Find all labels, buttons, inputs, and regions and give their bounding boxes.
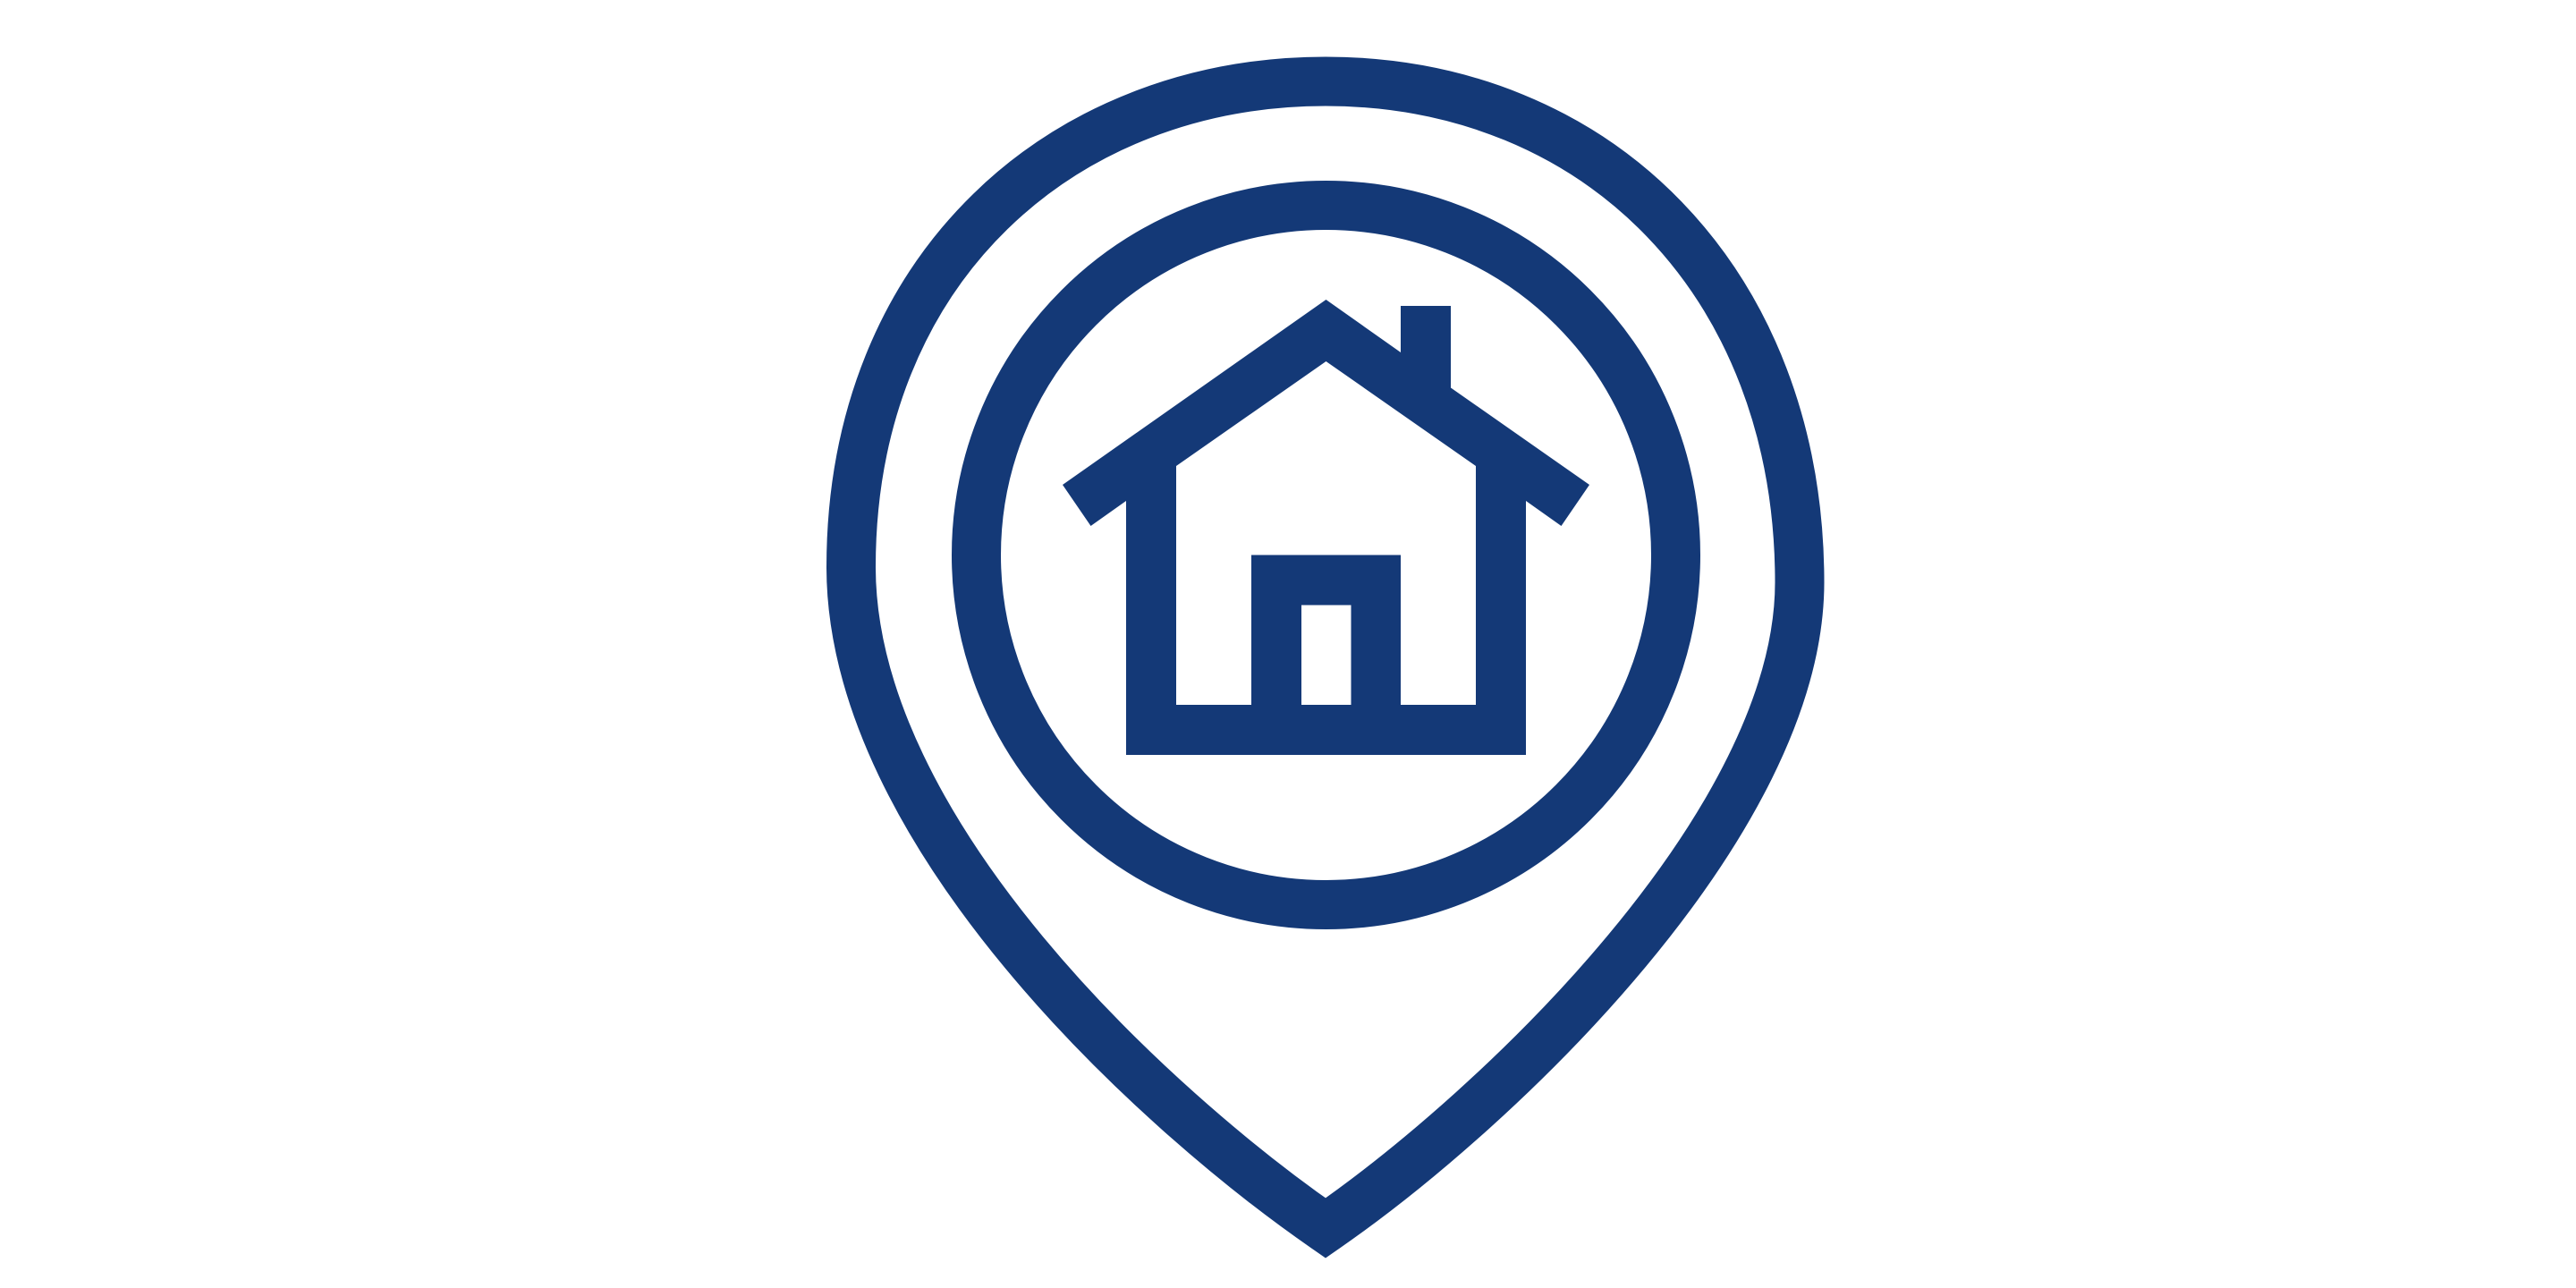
icon: map pin outline [852,81,1800,1228]
icon: circle ring [977,206,1676,905]
icon: house with chimney and door [1063,300,1589,755]
